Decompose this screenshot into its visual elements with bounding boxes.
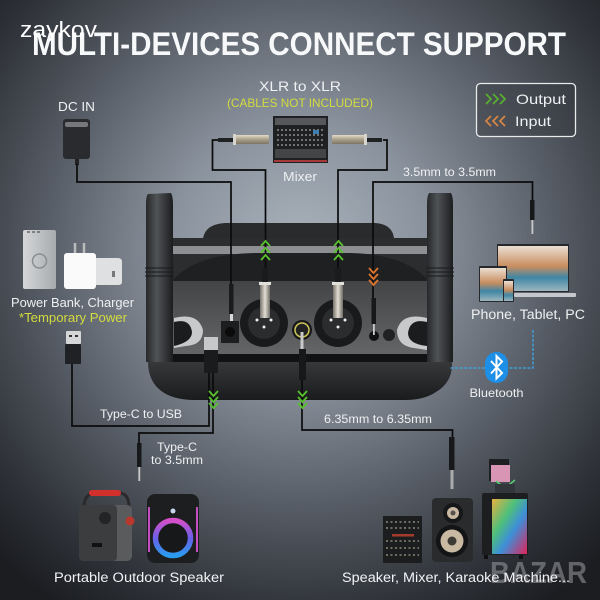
- right antenna: [427, 193, 453, 362]
- right antenna rings: [426, 268, 454, 276]
- watermark: zaykov: zaykov: [20, 17, 97, 42]
- icon: portable speaker with handle: [79, 490, 134, 561]
- dark arc: [172, 253, 429, 281]
- dark stripe: [172, 354, 429, 362]
- arrows: type-C output: [209, 391, 218, 408]
- label: speaker, mixer, karaoke machine: Speaker, Mixer, Karaoke Machine...: [342, 570, 570, 585]
- input arrows: [486, 116, 505, 126]
- icon: phone, tablet, laptop: [479, 244, 576, 302]
- 6.35mm socket: [292, 320, 312, 340]
- left antenna: [146, 193, 173, 362]
- plug: type-C: [204, 337, 218, 373]
- watermark: BAZAR: BAZAR: [490, 555, 587, 590]
- upper body: [172, 238, 429, 360]
- icon: chargers: [64, 243, 122, 289]
- icon: karaoke machine: [482, 459, 528, 559]
- label: Type-C to 3.5mm: Type-C: [157, 440, 197, 454]
- lid: [203, 223, 394, 238]
- right antenna connector: [397, 316, 427, 350]
- plug: 3.5mm device side: [530, 200, 534, 234]
- arrows: XLR right output: [334, 241, 343, 260]
- label: DC IN: DC IN: [58, 100, 95, 114]
- label: Mixer: Mixer: [283, 169, 318, 184]
- label: Type-C to 3.5mm: to 3.5mm: [151, 453, 203, 467]
- title: MULTI-DEVICES CONNECT SUPPORT: [32, 26, 566, 62]
- plug: right XLR: [332, 268, 344, 318]
- label: portable outdoor speaker: Portable Outdoor Speaker: [54, 570, 225, 585]
- control panel: [172, 281, 429, 354]
- input label: Input: [515, 113, 551, 129]
- label: 6.35mm to 6.35mm: 6.35mm to 6.35mm: [324, 414, 432, 426]
- light band: [172, 246, 429, 254]
- output arrows: [486, 94, 505, 104]
- output label: Output: [516, 91, 566, 107]
- legend: [476, 84, 576, 136]
- plug: 6.35mm device side: [449, 437, 454, 489]
- label: power bank, charger: Power Bank, Charger: [11, 295, 135, 310]
- arrows: 6.35mm output: [298, 391, 307, 408]
- label: phone, tablet, PC: Phone, Tablet, PC: [471, 307, 585, 322]
- base: [148, 362, 452, 400]
- right XLR socket: [314, 299, 362, 347]
- left antenna rings: [145, 268, 174, 276]
- plug: 3.5mm receiver side: [372, 298, 376, 335]
- label: 3.5mm to 3.5mm: 3.5mm to 3.5mm: [403, 167, 496, 179]
- label: Type-C to 3.5mm: [151, 440, 203, 467]
- plug: left XLR: [259, 268, 271, 318]
- plug: 3.5mm speaker side: [137, 443, 142, 481]
- icon: bluetooth: [485, 352, 508, 383]
- left connector core: [174, 321, 192, 346]
- plug: USB: [65, 331, 81, 364]
- label: Type-C to USB: Type-C to USB: [100, 407, 182, 421]
- icon: RGB party speaker: [147, 494, 199, 563]
- note: temporary power: *Temporary Power: [19, 311, 127, 325]
- label: Bluetooth: Bluetooth: [470, 386, 524, 400]
- bluetooth link: [450, 330, 533, 368]
- arrows: 3.5mm input: [369, 268, 378, 285]
- icon: power adapter: [63, 119, 90, 165]
- icon: DJ mixer: [383, 516, 422, 563]
- icon: power bank: [23, 230, 56, 289]
- 3.5mm socket: [369, 331, 379, 341]
- left antenna connector: [174, 316, 203, 348]
- icon: bookshelf speaker: [432, 498, 473, 562]
- icon: left XLR plug: [218, 134, 269, 145]
- heading: XLR to XLR: XLR to XLR: [259, 78, 341, 94]
- note: cables not included: (CABLES NOT INCLUDED): [227, 96, 373, 110]
- device: rear of wireless receiver: [145, 193, 454, 400]
- icon: mixer: [273, 116, 328, 163]
- left XLR socket: [240, 299, 288, 347]
- plug: DC: [229, 284, 234, 321]
- cables: [72, 140, 532, 443]
- right connector core: [408, 321, 427, 346]
- arrows: XLR left output: [261, 241, 270, 260]
- DC socket: [221, 321, 239, 343]
- plug: 6.35mm receiver side: [299, 332, 306, 380]
- button: [383, 329, 395, 341]
- icon: right XLR plug: [332, 134, 382, 145]
